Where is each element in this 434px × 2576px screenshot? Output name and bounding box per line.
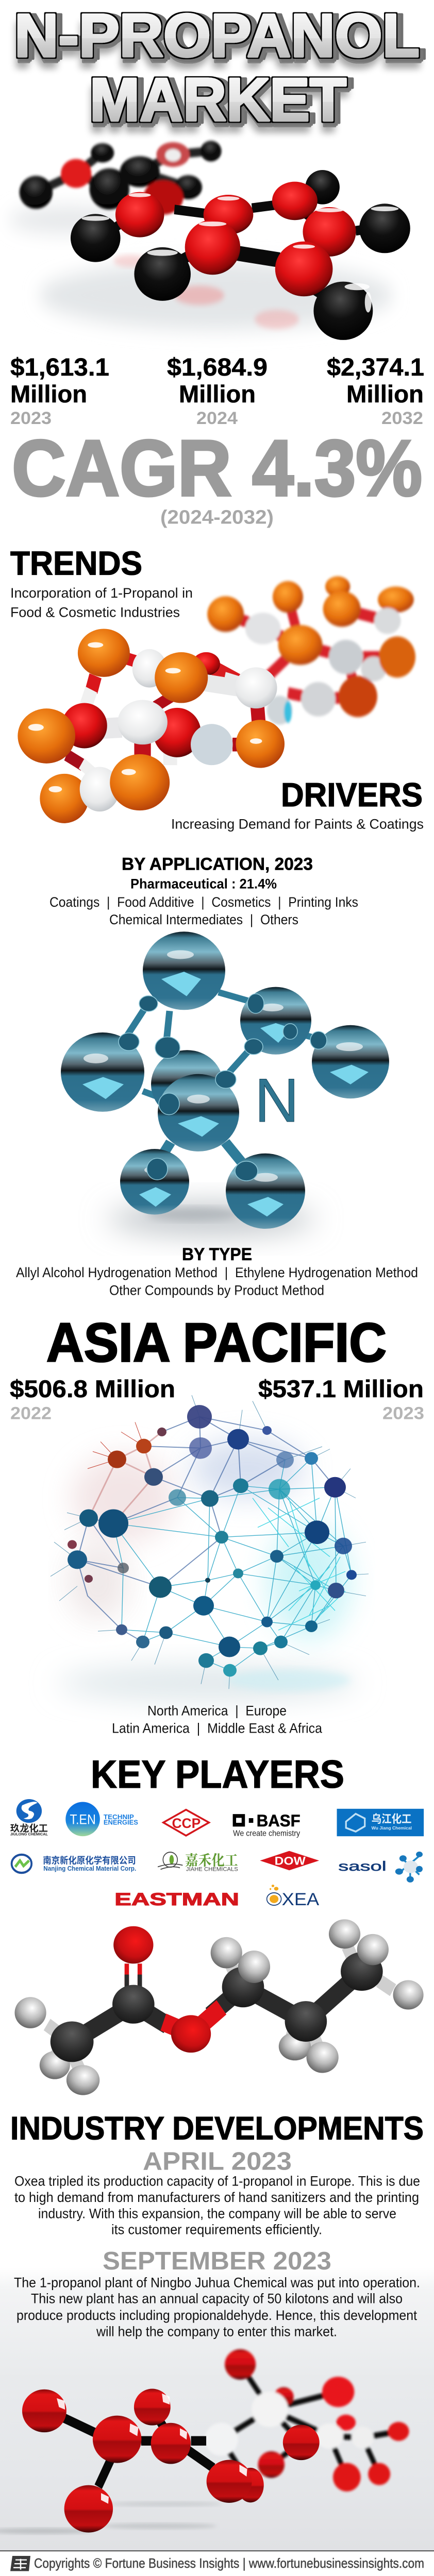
panel: key players — [10, 1752, 424, 1909]
icon: orange and white molecule — [18, 577, 415, 823]
stat 2032: 2032 — [381, 409, 423, 428]
logo: Jiahe Chemicals: JIAHE CHEMICALS — [186, 1867, 238, 1873]
stat 2024 — [167, 353, 268, 428]
region list — [112, 1703, 323, 1736]
region list: Latin America | Middle East & Africa — [112, 1720, 323, 1736]
stat 2024: Million — [179, 381, 256, 408]
icon: ball-and-stick propyl acetate molecule — [14, 1919, 424, 2095]
logo: Technip Energies — [65, 1802, 138, 1836]
stat 2023: $537.1 Million — [258, 1376, 424, 1403]
stat 2032: Million — [346, 381, 424, 408]
logo: Jiulong: 玖龙化工 — [10, 1823, 48, 1834]
logo: Nanjing Chemical Material — [12, 1855, 136, 1873]
development: September 2023 — [14, 2246, 420, 2339]
application list: Chemical Intermediates | Others — [109, 912, 298, 927]
logo: BASF: BASF — [257, 1811, 301, 1830]
stat 2022 — [10, 1376, 175, 1423]
heading: by application: BY APPLICATION, 2023 — [122, 854, 313, 874]
panel: by type — [16, 1245, 418, 1298]
panel: header — [8, 2, 420, 340]
leading segment share: Pharmaceutical : 21.4% — [130, 876, 277, 891]
heading: trends: TRENDS — [10, 545, 142, 582]
stat 2022: 2022 — [10, 1403, 52, 1423]
stat 2024: $1,684.9 — [167, 353, 268, 381]
panel: market size stats — [10, 353, 424, 528]
stat 2023 — [258, 1376, 424, 1423]
logo: Nanjing Chemical Material: Nanjing Chemical Material Corp. — [43, 1865, 136, 1872]
logo: Oxea: XEA — [282, 1889, 320, 1909]
region list: North America | Europe — [147, 1703, 287, 1718]
stat 2022: $506.8 Million — [10, 1376, 175, 1403]
trend text: Incorporation of 1-Propanol in — [10, 585, 193, 601]
stat 2023: Million — [10, 381, 87, 408]
type list: Other Compounds by Product Method — [109, 1282, 324, 1298]
development background with molecule — [0, 2267, 434, 2551]
stat 2024: 2024 — [196, 409, 238, 428]
footer — [0, 2551, 434, 2571]
icon: network sphere — [51, 1395, 369, 1701]
logo: Jiulong — [10, 1799, 48, 1836]
icon: red and black molecule — [8, 141, 410, 340]
development: April 2023: industry. With this expansion, the company will be able to serve — [38, 2206, 396, 2221]
title: MARKET — [90, 66, 346, 133]
logo: Nanjing Chemical Material: 南京新化原化学有限公司 — [43, 1855, 136, 1866]
logo: Jiahe Chemicals: 嘉禾化工 — [185, 1849, 238, 1870]
panel: regional analysis — [10, 1312, 424, 1736]
application list: Coatings | Food Additive | Cosmetics | Printing Inks — [49, 894, 358, 910]
trend text: Food & Cosmetic Industries — [10, 604, 180, 620]
stat 2023: $1,613.1 — [10, 353, 109, 381]
logo: Wu Jiang Chemical: Wu Jiang Chemical — [372, 1825, 412, 1831]
logo: Dow — [260, 1851, 319, 1870]
logo: Sasol — [338, 1852, 423, 1883]
logo: Jiahe Chemicals — [158, 1849, 238, 1873]
panel: industry developments — [0, 2110, 434, 2551]
stat 2032 — [327, 353, 424, 428]
heading: by type: BY TYPE — [182, 1245, 252, 1264]
application list — [49, 894, 358, 927]
logo: Sasol: sasol — [338, 1859, 387, 1874]
logo: CCP: CCP — [172, 1816, 201, 1831]
logo: Dow: DOW — [275, 1855, 306, 1868]
heading: region: ASIA PACIFIC — [46, 1312, 387, 1374]
development: April 2023: APRIL 2023 — [143, 2147, 292, 2175]
nitrogen symbol: N — [255, 1066, 299, 1135]
panel: by application — [49, 854, 358, 927]
logo: Oxea — [267, 1885, 320, 1909]
title — [14, 2, 420, 133]
icon: teal metallic molecule — [61, 931, 389, 1235]
panel: trends and drivers — [10, 545, 424, 832]
logo: CCP — [163, 1810, 209, 1836]
logo: Jiulong: JIULONG CHEMICAL — [10, 1833, 48, 1836]
logo: Technip Energies: ENERGIES — [104, 1819, 138, 1826]
stat 2023: 2023 — [10, 409, 52, 428]
icon: Fortune Business Insights logo — [10, 2556, 30, 2571]
trend text — [10, 585, 193, 620]
logo: Wu Jiang Chemical: 乌江化工 — [372, 1813, 412, 1825]
logo: Eastman: EASTMAN — [114, 1889, 239, 1909]
type list — [16, 1265, 418, 1298]
stat 2032: $2,374.1 — [327, 353, 424, 381]
heading: drivers: DRIVERS — [281, 777, 423, 814]
title: N-PROPANOL — [14, 2, 420, 70]
stat 2023: 2023 — [382, 1403, 424, 1423]
CAGR period: (2024-2032) — [160, 507, 274, 528]
logo: Wu Jiang Chemical — [337, 1809, 424, 1836]
development: April 2023: its customer requirements efficiently. — [111, 2222, 322, 2238]
logo: Technip Energies: TECHNIP — [104, 1813, 134, 1821]
logo: BASF — [233, 1811, 301, 1838]
development: September 2023: SEPTEMBER 2023 — [103, 2246, 331, 2275]
driver text: Increasing Demand for Paints & Coatings — [171, 816, 424, 832]
development: September 2023: will help the company to enter this market. — [96, 2324, 337, 2339]
logo: BASF: We create chemistry — [233, 1829, 301, 1838]
stat 2023 — [10, 353, 109, 428]
heading: key players: KEY PLAYERS — [91, 1752, 344, 1797]
development: April 2023 — [14, 2147, 420, 2238]
logos — [10, 1799, 424, 1909]
logo: Technip Energies: T.EN — [70, 1812, 96, 1827]
